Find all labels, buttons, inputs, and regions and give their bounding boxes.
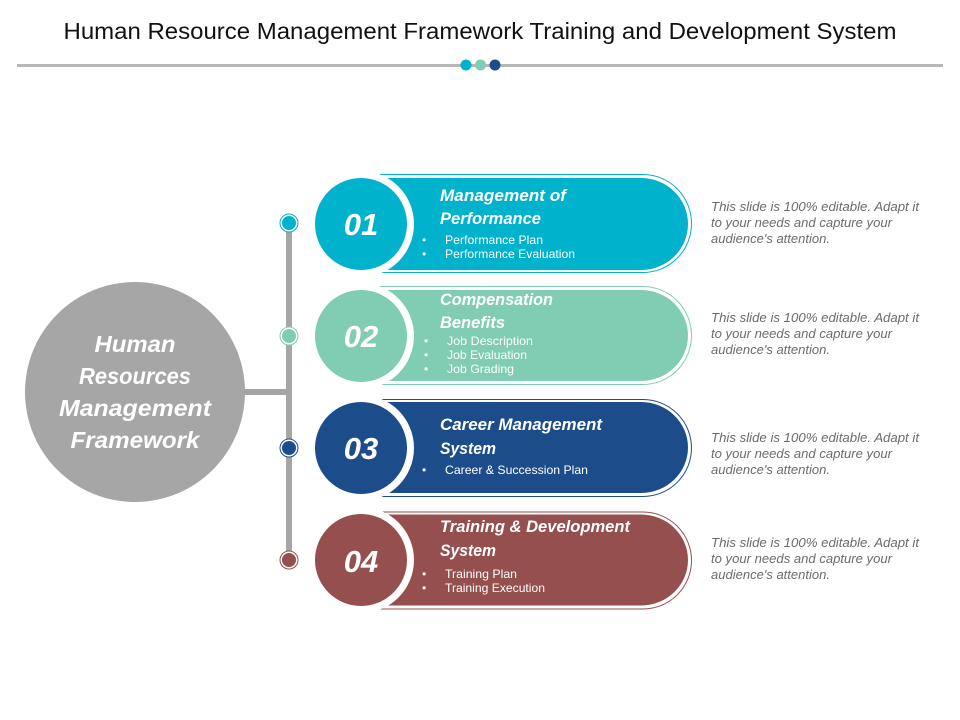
panel: item 01: 01 bbox=[344, 207, 378, 242]
panel: item 04: • bbox=[422, 581, 426, 595]
panel: item 01: • bbox=[422, 247, 426, 261]
panel: item 04: Training Execution bbox=[445, 581, 545, 595]
description 01: audience's attention. bbox=[711, 231, 830, 246]
description 01: to your needs and capture your bbox=[711, 215, 893, 230]
description 02 bbox=[711, 310, 919, 357]
description 04: to your needs and capture your bbox=[711, 551, 893, 566]
description 04: This slide is 100% editable. Adapt it bbox=[711, 535, 919, 550]
panel: item 03: System bbox=[440, 440, 496, 458]
panel: item 02: Benefits bbox=[440, 314, 505, 332]
panel: item 03: 03 bbox=[344, 431, 378, 466]
panel: item 04: 04 bbox=[344, 544, 378, 579]
panel: item 02: Compensation bbox=[440, 291, 553, 309]
panel: item 03: Career & Succession Plan bbox=[445, 463, 588, 477]
description 04 bbox=[711, 535, 919, 582]
panel: item 04 bbox=[280, 507, 692, 613]
panel: item 02: • bbox=[424, 334, 428, 348]
description 02: audience's attention. bbox=[711, 342, 830, 357]
title: Human Resource Management Framework Training and Development System bbox=[64, 18, 896, 44]
panel: item 02: • bbox=[424, 362, 428, 376]
central circle: framework: Management bbox=[59, 395, 212, 421]
header rule with dots bbox=[17, 60, 943, 70]
description 04: audience's attention. bbox=[711, 567, 830, 582]
panel: item 02 bbox=[280, 283, 692, 389]
panel: item 02: 02 bbox=[344, 319, 378, 354]
description 01: This slide is 100% editable. Adapt it bbox=[711, 199, 919, 214]
description 01 bbox=[711, 199, 919, 246]
description 03: audience's attention. bbox=[711, 462, 830, 477]
description 02: This slide is 100% editable. Adapt it bbox=[711, 310, 919, 325]
panel: item 01: Performance Plan bbox=[445, 233, 543, 247]
panel: item 01: Performance Evaluation bbox=[445, 247, 575, 261]
timeline connector bbox=[240, 223, 292, 560]
panel: item 03: Career Management bbox=[440, 416, 604, 434]
timeline node 04 bbox=[280, 551, 298, 569]
description 03 bbox=[711, 430, 919, 477]
panel: item 01 bbox=[280, 171, 692, 277]
panel: item 04: • bbox=[422, 567, 426, 581]
timeline node 01 bbox=[280, 214, 298, 232]
panel: item 04: Training & Development bbox=[440, 518, 632, 536]
panel: item 02: Job Evaluation bbox=[447, 348, 527, 362]
panel: item 02: • bbox=[424, 348, 428, 362]
central circle: framework: Resources bbox=[79, 363, 191, 389]
panel: item 03: • bbox=[422, 463, 426, 477]
panel: item 02: Job Description bbox=[447, 334, 533, 348]
panel: item 01: Management of bbox=[440, 187, 568, 205]
panel: item 01: Performance bbox=[440, 210, 541, 228]
panel: item 04: Training Plan bbox=[445, 567, 517, 581]
description 03: to your needs and capture your bbox=[711, 446, 893, 461]
central circle: framework: Framework bbox=[70, 427, 201, 453]
panel: item 02: Job Grading bbox=[447, 362, 514, 376]
panel: item 04: System bbox=[440, 542, 496, 560]
panel: item 01: • bbox=[422, 233, 426, 247]
central circle: framework bbox=[25, 282, 245, 502]
description 03: This slide is 100% editable. Adapt it bbox=[711, 430, 919, 445]
panel: item 03 bbox=[280, 395, 692, 501]
description 02: to your needs and capture your bbox=[711, 326, 893, 341]
timeline node 02 bbox=[280, 327, 298, 345]
central circle: framework: Human bbox=[94, 331, 176, 357]
timeline node 03 bbox=[280, 439, 298, 457]
